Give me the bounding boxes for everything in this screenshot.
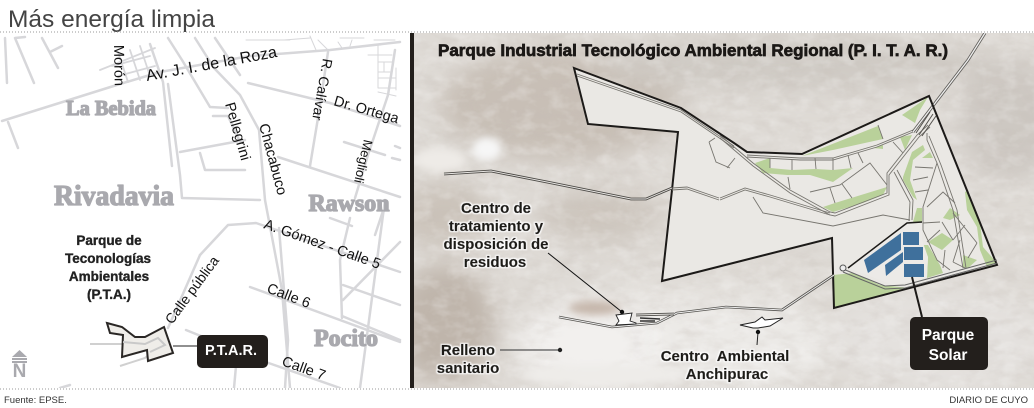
label: treatment centre: disposición de	[443, 236, 549, 253]
title: Más energía limpia	[8, 6, 215, 33]
place names	[54, 96, 390, 352]
label: Centro Ambiental Anchipurac: Anchipurac	[686, 366, 768, 383]
street labels: Chacabuco	[255, 122, 290, 197]
heading: P.I.T.A.R.: Parque Industrial Tecnológico Ambiental Regional (P. I. T. A. R.)	[438, 42, 948, 60]
P.T.A.R. site outline	[90, 323, 197, 366]
street labels: Calle pública	[162, 253, 222, 327]
credit: DIARIO DE CUYO	[949, 395, 1028, 406]
central plot	[920, 245, 928, 276]
street labels: Av. J. I. de la Roza	[145, 44, 278, 85]
label: Centro Ambiental Anchipurac: Centro Ambiental	[661, 348, 789, 365]
street labels	[110, 44, 402, 384]
label: landfill	[437, 342, 562, 377]
roads to the facilities	[559, 275, 834, 327]
icon: north arrow: N	[13, 361, 26, 382]
street labels: Dr. Ortega	[332, 93, 402, 128]
street labels: A. Gómez - Calle 5	[262, 217, 382, 273]
label: Parque de Tecnologías Ambientales: Parque de	[76, 233, 142, 248]
callout: Parque Solar	[910, 277, 988, 370]
source note: Fuente: EPSE.	[4, 395, 67, 406]
green zones	[755, 97, 997, 308]
place names: Rawson	[308, 191, 390, 217]
interior roads	[577, 74, 977, 270]
street labels: Calle 7	[280, 354, 328, 384]
callout: P.T.A.R.	[197, 335, 268, 368]
panel: satellite map	[395, 33, 1034, 390]
label: Parque de Tecnologías Ambientales: Ambientales	[69, 269, 149, 284]
callout: Parque Solar: Parque	[922, 327, 975, 344]
street labels: R. Calívar	[309, 57, 336, 122]
label: Parque de Tecnologías Ambientales: (P.T.A.)	[87, 287, 131, 302]
callout: P.T.A.R.: P.T.A.R.	[205, 343, 257, 359]
callout: Parque Solar: Solar	[929, 347, 967, 364]
label: Centro Ambiental Anchipurac	[661, 317, 789, 383]
place names: Rivadavia	[54, 181, 174, 212]
access road	[913, 33, 985, 132]
place names: Pocito	[314, 326, 378, 352]
terrain background	[395, 33, 1034, 390]
street labels: Pellegrini	[221, 101, 253, 162]
road network	[2, 36, 400, 388]
label: Parque de Tecnologías Ambientales: Teconologías	[65, 251, 151, 266]
label: treatment centre	[443, 200, 660, 325]
icon: north arrow	[12, 350, 27, 382]
label: Parque de Tecnologías Ambientales	[65, 233, 151, 302]
street labels: Calle 6	[265, 281, 312, 312]
icon: solar panels	[864, 232, 924, 277]
label: landfill: sanitario	[437, 360, 499, 377]
label: treatment centre: tratamiento y	[449, 218, 544, 235]
divider bar	[410, 33, 414, 388]
street labels: Meglioli	[351, 138, 376, 185]
panel: location street map	[2, 36, 402, 388]
street labels: Morón	[110, 45, 127, 86]
label: treatment centre: Centro de	[461, 200, 531, 217]
place names: La Bebida	[66, 96, 156, 120]
label: treatment centre: residuos	[464, 254, 526, 271]
perimeter outline	[574, 68, 997, 308]
label: landfill: Relleno	[441, 342, 495, 359]
industrial park area	[444, 33, 997, 327]
